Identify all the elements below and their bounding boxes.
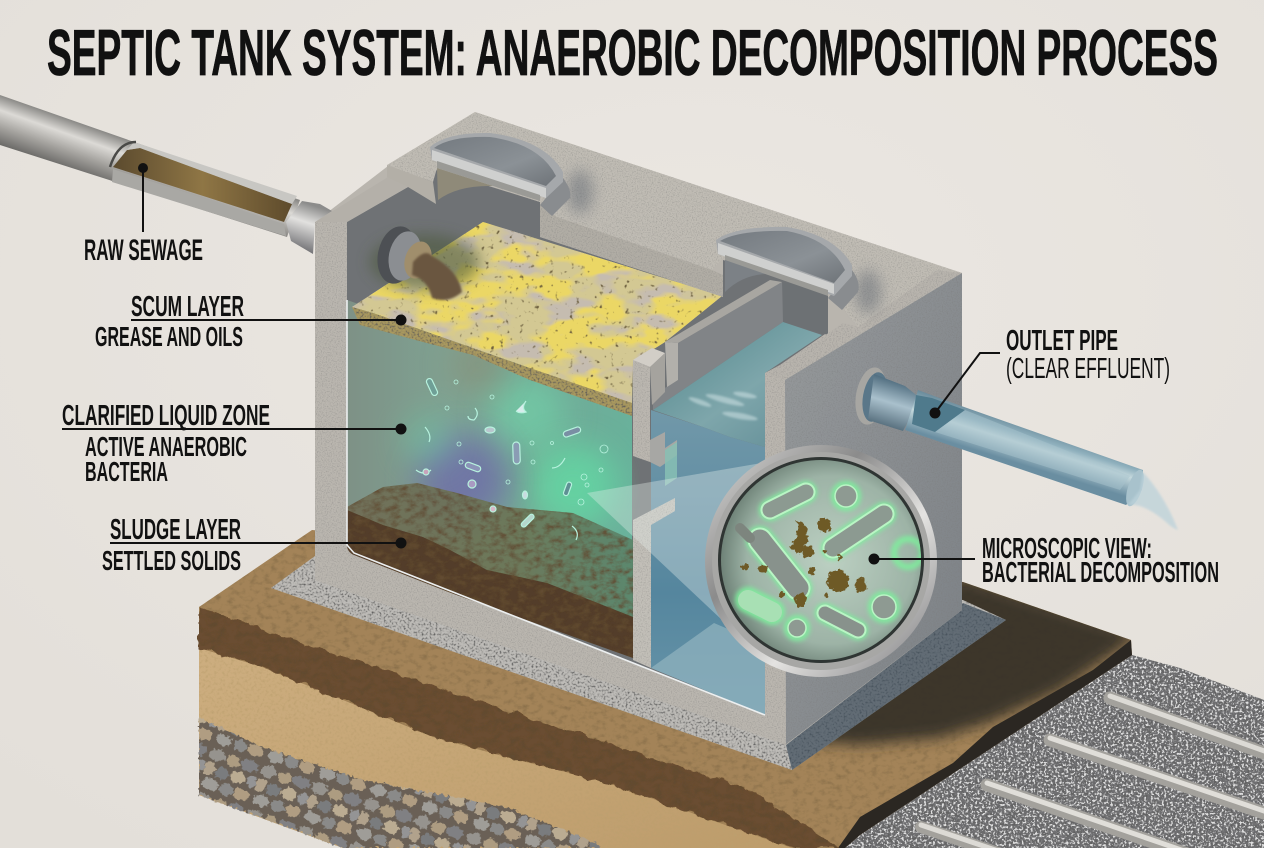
label: outlet pipe: OUTLET PIPE <box>1006 325 1118 357</box>
right wall top band <box>765 268 962 380</box>
pipe body <box>905 390 1143 505</box>
left access lid <box>430 133 570 216</box>
bacteria outlines <box>760 492 884 630</box>
cutaway showing sewage <box>113 148 292 222</box>
baffle tooth top <box>633 348 665 367</box>
baffle foot with slot <box>650 432 677 467</box>
label: raw sewage <box>84 163 203 267</box>
right lid arch <box>725 258 775 292</box>
baffle rear wall face <box>653 282 783 410</box>
cut edge <box>110 142 136 167</box>
liquid colour glows <box>404 337 617 531</box>
label: outlet pipe <box>930 325 1170 418</box>
gravel pad under tank <box>271 556 1006 770</box>
left collar front <box>387 165 436 204</box>
water pouring out <box>1128 472 1178 530</box>
drain pipe 2 <box>1050 738 1264 815</box>
label: clarified liquid zone: CLARIFIED LIQUID ZONE <box>62 400 270 432</box>
water surface ripples <box>688 390 758 422</box>
label: scum layer <box>95 291 406 352</box>
label: sludge layer <box>102 514 406 576</box>
baffle rear wall top <box>665 280 782 343</box>
cutaway lower wall <box>112 169 286 236</box>
label: clarified liquid zone: BACTERIA <box>85 456 168 487</box>
right outer wall <box>785 273 962 745</box>
organic debris <box>741 518 867 607</box>
right access lid <box>716 227 859 310</box>
sludge layer <box>347 510 633 658</box>
drain pipe 4 <box>921 825 1010 848</box>
baffle slot <box>665 442 677 486</box>
baffle cut face <box>633 360 650 462</box>
label: sludge layer: SLUDGE LAYER <box>110 514 241 546</box>
tank front frame <box>315 222 786 745</box>
topsoil surface <box>199 530 1132 848</box>
gravel stratum <box>199 717 600 848</box>
glowing bacteria halos <box>748 484 922 638</box>
cutaway rear rim <box>127 142 297 204</box>
pipe coupling <box>868 374 920 431</box>
pipe opening near coupling <box>912 395 965 432</box>
pipe end opening <box>1122 468 1148 508</box>
wall flange <box>851 365 891 427</box>
glass edge highlight <box>347 300 765 715</box>
sand layer <box>199 648 792 848</box>
clarified liquid zone <box>347 300 632 640</box>
tank shadow on soil <box>817 582 1132 755</box>
interior inlet flange <box>372 223 462 300</box>
lens glass <box>721 460 921 660</box>
left lid arch <box>437 168 493 200</box>
left wall top band <box>315 177 408 222</box>
baffle side of tooth <box>650 353 665 405</box>
coupling <box>286 201 332 254</box>
greenish shaded back of scum <box>370 234 480 290</box>
lid shadows <box>567 170 881 314</box>
lower baffle wall <box>633 498 675 668</box>
label: sludge layer: SETTLED SOLIDS <box>102 545 241 576</box>
label: clarified liquid zone: ACTIVE ANAEROBIC <box>85 431 247 462</box>
floating bacteria <box>416 378 608 540</box>
drain pipe 3 <box>987 783 1190 848</box>
soil cross-section <box>199 530 1140 848</box>
label: scum layer: GREASE AND OILS <box>95 321 243 352</box>
septic tank <box>315 112 962 745</box>
bacteria bodies <box>740 492 884 630</box>
drain field: gravel bed with perforated pipes <box>840 655 1264 848</box>
lens ring <box>705 445 937 677</box>
microscope beam <box>587 462 767 620</box>
label: raw sewage: RAW SEWAGE <box>84 234 203 267</box>
baffle second tooth <box>665 342 678 387</box>
outlet chamber right back wall <box>783 282 828 335</box>
label: scum layer: SCUM LAYER <box>131 291 244 323</box>
label: microscopic view <box>868 533 1219 589</box>
scum layer front edge <box>352 307 632 416</box>
pipe body <box>0 95 300 237</box>
drain pipe 1 <box>1110 696 1264 755</box>
tank shell base <box>315 112 962 745</box>
label: clarified liquid zone <box>62 400 406 487</box>
dark earth band <box>199 607 840 848</box>
tank top slab <box>387 112 962 327</box>
slab front edge <box>838 640 1132 848</box>
scum layer top <box>352 222 722 405</box>
inlet pipe <box>0 95 332 254</box>
blue-grey shaded pad on right <box>786 603 1006 770</box>
left wall teal edge <box>338 300 347 540</box>
outlet chamber water surface <box>653 322 822 447</box>
outlet chamber water <box>651 410 765 715</box>
interior back wall <box>347 170 828 715</box>
chamber floor <box>651 623 765 715</box>
mottled settling zone <box>347 483 633 625</box>
slab front face <box>540 205 723 297</box>
magnifier: microscopic view <box>705 445 937 677</box>
sewage stream <box>412 253 462 300</box>
outlet pipe <box>851 365 1178 530</box>
